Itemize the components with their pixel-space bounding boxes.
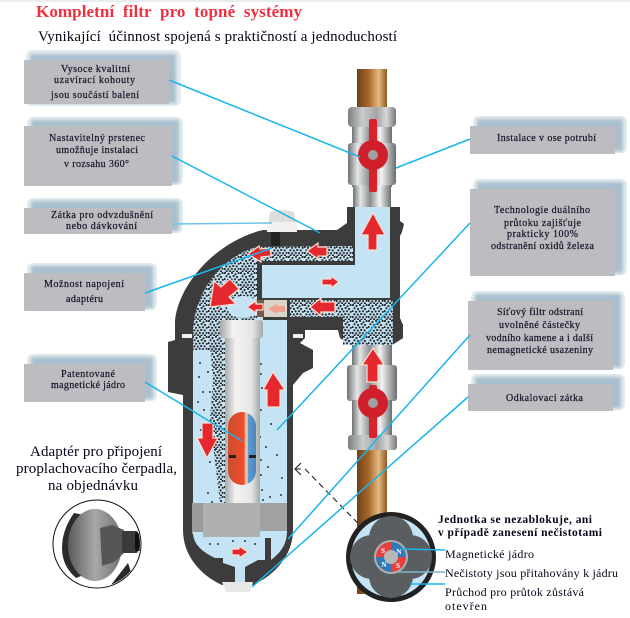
adapter caption [16, 444, 177, 494]
leader lines [145, 80, 470, 587]
callout: ring: umožňuje instalaci [56, 145, 138, 156]
clean water channel [262, 207, 390, 298]
callout: mesh filter: uvolněné částečky [499, 320, 580, 331]
callout: drain plug [468, 374, 625, 411]
filter housing [168, 207, 404, 592]
dirt band near magnet tube [210, 345, 226, 503]
detail legend: otevřen [445, 599, 487, 613]
callout: vent plug [24, 198, 183, 234]
detail legend: Magnetické jádro [445, 547, 534, 561]
magnetic core window [228, 412, 256, 485]
vent plug [267, 210, 297, 232]
callout: dual flow: prakticky 100% [507, 229, 578, 240]
copper pipe top [357, 69, 387, 109]
callout: dual flow: Technologie duálního [494, 205, 590, 216]
scattered dirt [198, 363, 282, 502]
clover lobes [350, 516, 432, 598]
detail heading: Jednotka se nezablokuje, ani [438, 514, 593, 526]
subtitle: Vynikající účinnost spojená s praktičností a jednoduchostí [38, 29, 397, 45]
dome stipple [193, 247, 257, 350]
bottom ball valve [347, 345, 397, 450]
adapter caption: na objednávku [48, 478, 138, 494]
detail heading [438, 514, 603, 539]
main body interior [193, 247, 287, 505]
callout: ring: v rozsahu 360° [64, 159, 129, 170]
magnet quadrants: S [396, 561, 400, 570]
callout: valves: uzavírací kohouty [54, 75, 135, 86]
magnet quadrants: N [381, 560, 387, 569]
housing shell [168, 207, 404, 585]
callout: inline installation [470, 116, 627, 154]
callout: vent plug: nebo dávkování [66, 221, 137, 232]
passage window [264, 300, 287, 317]
detail legend: Nečistoty jsou přitahovány k jádru [445, 566, 618, 580]
copper pipe bottom [357, 448, 387, 594]
gray collar [192, 503, 287, 531]
lower dirty channel [290, 300, 393, 345]
callout: drain plug: Odkalovací zátka [506, 393, 584, 404]
detail heading: v případě zanesení nečistotami [438, 527, 603, 539]
adapter caption: Adaptér pro připojení [30, 444, 162, 460]
clear gap in dome [227, 296, 259, 318]
callout: dual flow [470, 179, 627, 276]
dashed pointer arrow [295, 463, 387, 553]
callout: adapter connection: Možnost napojení [44, 279, 124, 290]
red flow arrows [197, 213, 385, 558]
drain plug [222, 582, 253, 592]
callout: magnetic core: magnetické jádro [51, 380, 125, 391]
callout: valves [24, 50, 181, 106]
callout: valves: Vysoce kvalitní [61, 64, 130, 75]
callout: mesh filter: vodního kamene a i další [486, 333, 593, 344]
magnet tube [225, 330, 260, 504]
title: Kompletní filtr pro topné systémy [36, 2, 302, 21]
callout: mesh filter: Síťový filtr odstraní [497, 307, 583, 318]
callout: adapter connection [24, 263, 157, 311]
top ball valve [348, 107, 396, 208]
magnet quadrants: S [381, 546, 385, 555]
callout: dual flow: průtoku zajišťuje [504, 218, 582, 229]
callout: valves: jsou součástí balení [50, 90, 139, 101]
callout: ring: Nastavitelný prstenec [49, 133, 146, 144]
detail legend: Průchod pro průtok zůstává [445, 585, 585, 599]
detail legend [445, 547, 618, 613]
callout: mesh filter: nemagnetické usazeniny [487, 345, 593, 356]
callout: magnetic core [24, 354, 157, 402]
callout: vent plug: Zátka pro odvzdušnění [51, 210, 153, 221]
callout: inline installation: Instalace v ose potrubí [497, 133, 596, 144]
magnet quadrants [374, 540, 408, 574]
callout: magnetic core: Patentované [61, 369, 116, 380]
lower chamber [193, 531, 287, 582]
callout: adapter connection: adaptéru [66, 294, 103, 305]
cross-section detail circle [348, 514, 434, 600]
upper dirty channel [257, 246, 353, 261]
callout: mesh filter [468, 291, 625, 370]
adapter caption: proplachovacího čerpadla, [16, 461, 177, 477]
magnet quadrants: N [396, 547, 402, 556]
callout: ring [24, 117, 183, 186]
adapter photo [53, 500, 141, 592]
callout: dual flow: odstranění oxidů železa [491, 241, 595, 252]
